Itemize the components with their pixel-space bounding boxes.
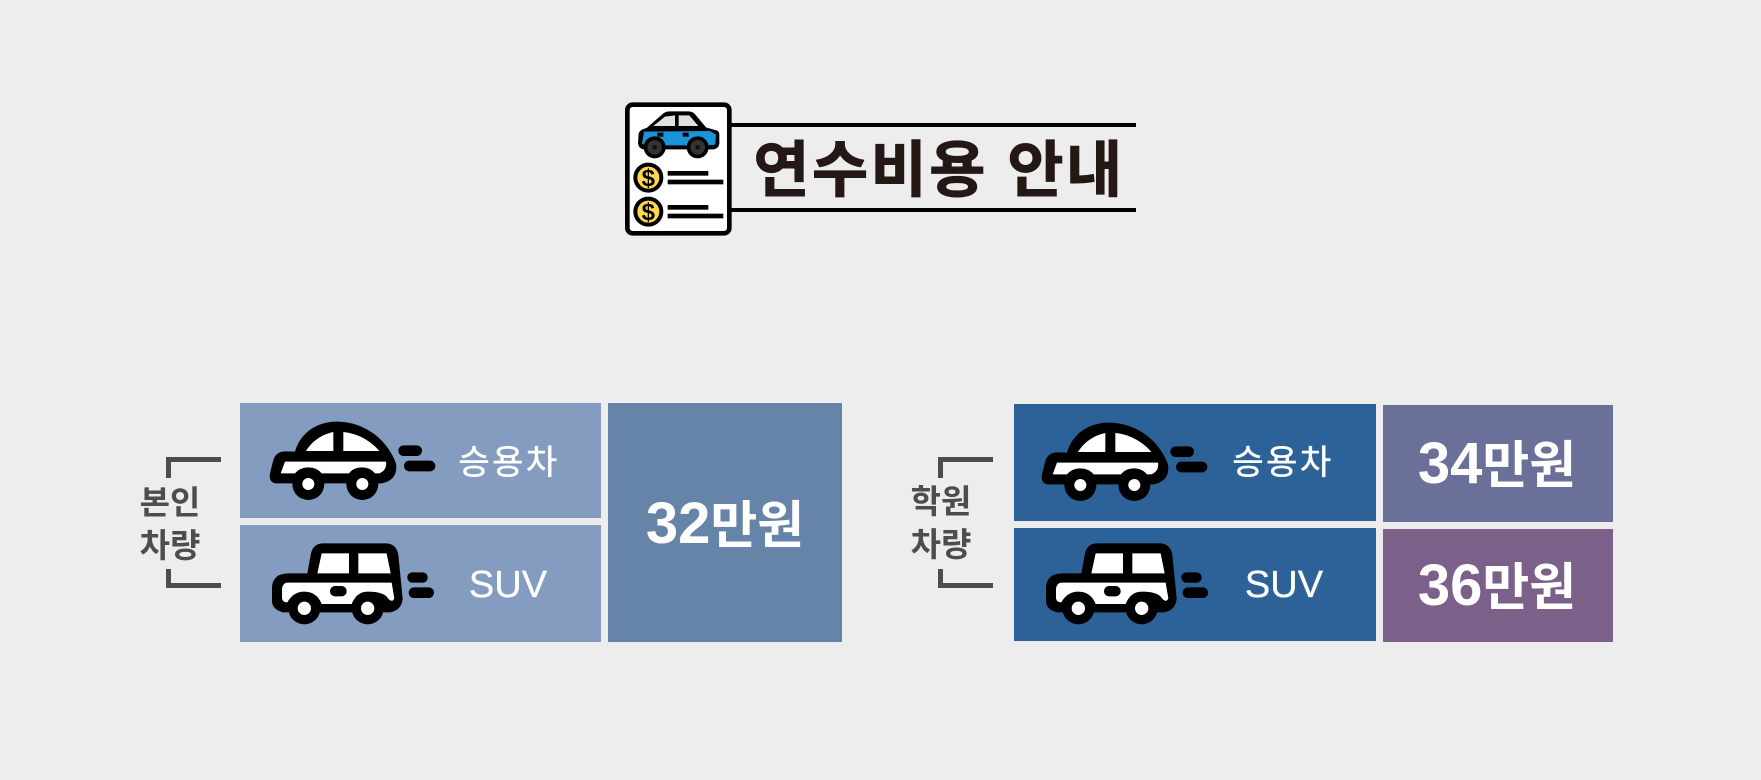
price text: 36만원 [1418,553,1576,618]
row: sedan [240,403,601,518]
label: 학원 차량: 학원 [911,483,971,520]
price text: 32만원 [646,491,804,556]
panel: 학원 차량 [911,404,1613,642]
price text: 34만원 [1418,431,1576,496]
icon: car cost document: $ [642,165,656,192]
label: SUV: SUV [469,564,547,606]
row: sedan [1014,404,1376,521]
label: 학원 차량 [911,483,971,563]
panel: 본인 차량 [140,403,842,642]
label: 승용차: 승용차 [458,444,560,482]
bracket: bottom [938,569,993,588]
icon: car cost document: $ [642,199,656,226]
icon: SUV [1046,543,1208,624]
bracket: bottom [166,569,221,588]
price: 34만원 [1383,405,1613,522]
title rule top [725,123,1136,127]
price: 36만원 [1383,529,1613,642]
title text: 연수비용 안내 [753,136,1125,204]
row: SUV [1014,528,1376,641]
row: SUV [240,525,601,642]
label: 승용차: 승용차 [1232,444,1334,482]
label: SUV: SUV [1245,564,1323,606]
icon: sedan [1042,422,1208,501]
label: 본인 차량 [140,484,200,564]
icon: SUV [272,543,434,624]
icon: sedan [270,422,436,500]
icon: car cost document [625,102,732,236]
title block [625,102,1136,236]
title rule bottom [725,208,1136,212]
bracket: top [938,457,993,478]
label: 학원 차량: 차량 [911,526,971,563]
bracket: top [166,457,221,478]
label: 본인 차량: 본인 [140,484,200,521]
label: 본인 차량: 차량 [140,527,200,564]
price: 32만원 [608,403,842,642]
